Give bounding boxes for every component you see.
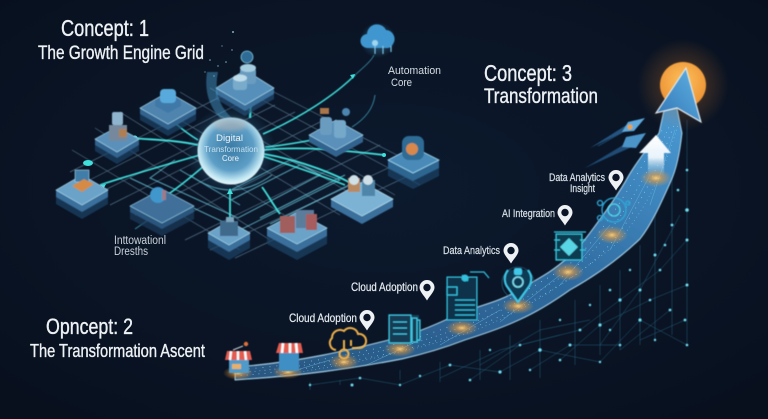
label: cloud adoption lower: Cloud Adoption xyxy=(289,311,357,325)
pin: cloud adoption lower xyxy=(360,310,374,330)
pin: data analytics insight xyxy=(608,170,624,190)
label: data analytics insight xyxy=(549,172,605,195)
heading: concept 1 xyxy=(38,15,204,64)
icon: shop storefront xyxy=(276,343,303,371)
heading: concept 2 xyxy=(30,314,205,361)
panel: growth engine grid xyxy=(56,22,441,260)
network nodes xyxy=(309,169,689,386)
label: data analytics insight: Insight xyxy=(570,183,595,195)
icon: automation cloud xyxy=(360,22,396,58)
label: international: Dresths xyxy=(114,246,148,258)
heading: concept 3: Concept: 3 xyxy=(484,60,572,86)
platform: cylinders right xyxy=(309,108,363,157)
sun xyxy=(637,39,729,131)
heading: concept 1: Concept: 1 xyxy=(61,15,149,41)
sphere label: Core xyxy=(222,153,239,163)
panel: transformation ascent xyxy=(223,39,729,390)
platform: top cylinders xyxy=(206,51,274,118)
sphere label: Transformation xyxy=(204,144,258,154)
icon: server dashboard xyxy=(447,272,489,320)
label: cloud adoption upper: Cloud Adoption xyxy=(351,280,418,294)
sphere label xyxy=(204,133,258,163)
label: automation core: Core xyxy=(391,77,412,89)
platform: shield device xyxy=(388,136,439,189)
connection lines xyxy=(100,55,384,229)
isometric grid xyxy=(70,88,430,258)
label: automation core: Automation xyxy=(388,65,441,77)
icon: insight gear xyxy=(598,198,630,222)
platform: colourful crates xyxy=(331,175,393,224)
icon: rockets xyxy=(585,118,646,168)
sphere label: Digital xyxy=(216,133,243,144)
heading: concept 3: Transformation xyxy=(484,85,598,108)
sparkles above core xyxy=(204,31,234,77)
label: international xyxy=(114,235,166,258)
icon: chip xyxy=(554,232,586,260)
pin: ai integration xyxy=(558,205,572,226)
icon: small shop xyxy=(225,342,252,373)
central sphere xyxy=(186,106,276,196)
heading: concept 1: The Growth Engine Grid xyxy=(38,43,204,64)
heading: concept 2: Opncept: 2 xyxy=(46,314,133,339)
platform: laptop xyxy=(56,170,108,219)
label: automation core xyxy=(388,65,441,89)
central circuit rings xyxy=(130,160,355,230)
label: international: Inttowationl xyxy=(114,235,166,247)
platform: bottom crates xyxy=(267,210,327,260)
label: ai integration: AI Integration xyxy=(502,208,555,220)
icon: white up arrow xyxy=(639,135,671,176)
platform: upper left xyxy=(140,89,196,136)
platform: left box xyxy=(95,112,139,164)
pin: cloud adoption upper xyxy=(420,280,434,300)
icon: shield lock xyxy=(502,267,534,302)
label: data analytics: Data Analytics xyxy=(443,245,500,257)
heading: concept 3 xyxy=(484,60,598,108)
pin: data analytics xyxy=(504,243,518,264)
platform: bottom box xyxy=(208,217,250,260)
icon: documents xyxy=(389,315,420,343)
arrow head xyxy=(656,68,701,122)
ribbon sparkle xyxy=(235,125,678,376)
heading: concept 2: The Transformation Ascent xyxy=(30,341,205,361)
platform: gear xyxy=(130,187,194,236)
ribbon glowing nodes xyxy=(223,169,672,380)
label: data analytics insight: Data Analytics xyxy=(549,172,605,184)
curved ribbon xyxy=(235,108,682,380)
icon: orange cloud xyxy=(330,328,366,358)
network below the curve xyxy=(310,120,687,390)
